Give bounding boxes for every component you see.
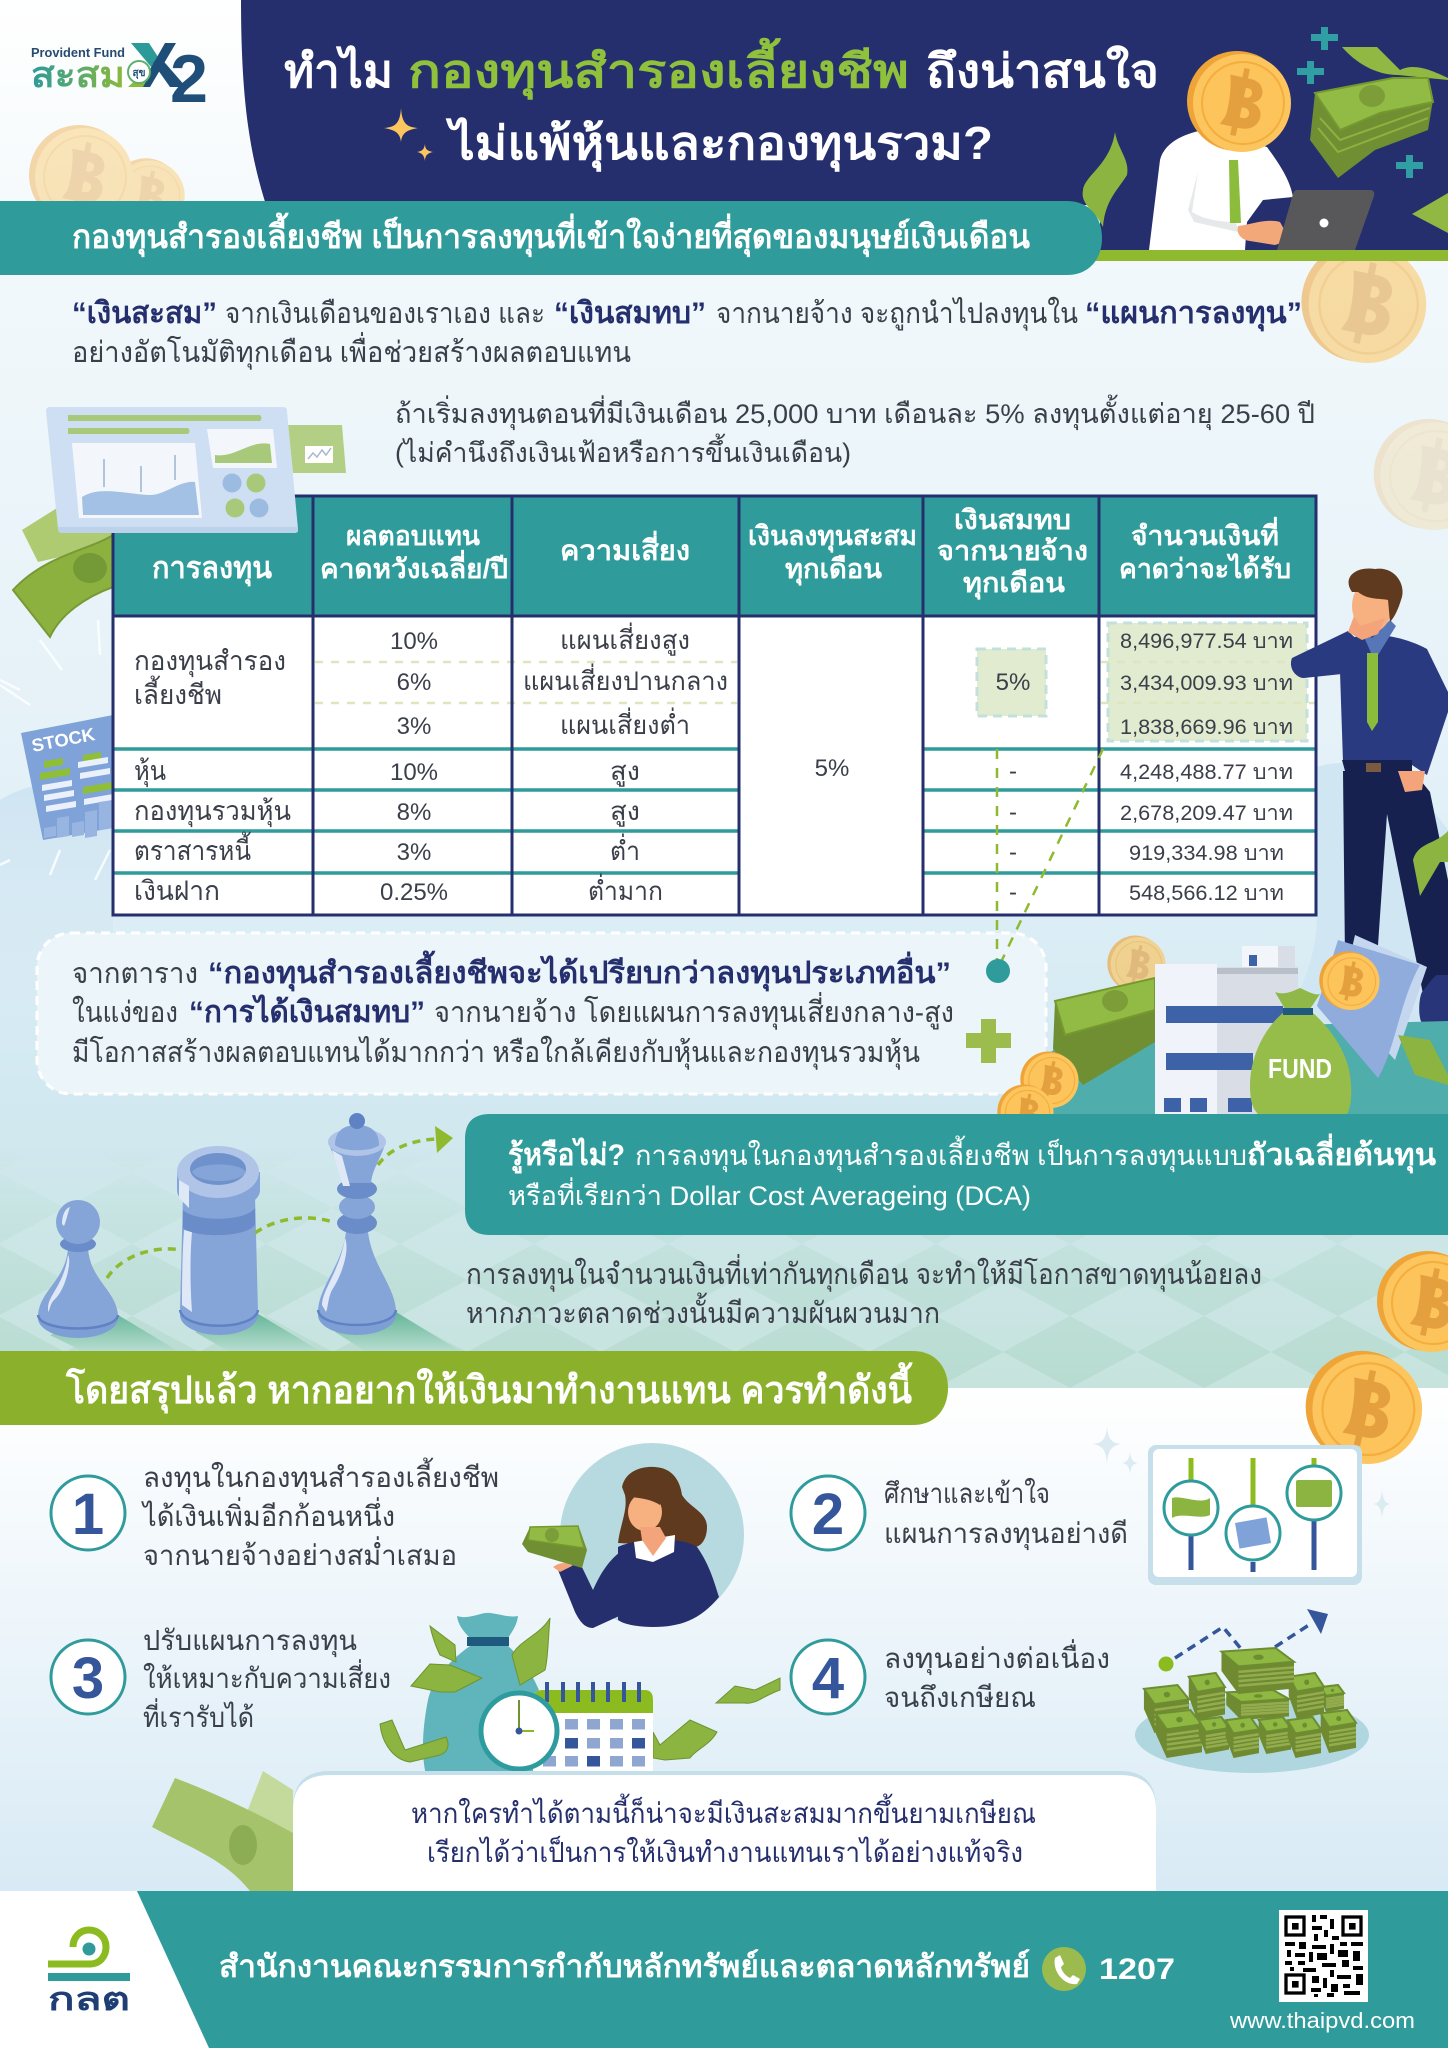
illustration: woman with cash — [522, 1443, 744, 1628]
panel: did you know — [465, 1114, 1448, 1235]
step 4: ลงทุนอย่างต่อเนื่อง — [884, 1639, 1110, 1676]
column: expected return: 3% — [397, 713, 431, 740]
header panel — [241, 0, 1448, 250]
table header labels: การลงทุน — [152, 552, 272, 587]
column: expected return: 10% — [390, 759, 438, 786]
column: risk: แผนเสี่ยงปานกลาง — [523, 663, 728, 696]
column: employer match: 5% — [996, 669, 1030, 696]
table dashed sub-row lines — [315, 662, 1315, 703]
illustration: money bag clock calendar — [380, 1613, 780, 1775]
column: expected return: 10% — [390, 628, 438, 655]
column: investment type: ตราสารหนี้ — [134, 831, 251, 866]
assumption text: (ไม่คำนึงถึงเงินเฟ้อหรือการขึ้นเงินเดือน) — [395, 433, 851, 468]
step 1: ได้เงินเพิ่มอีกก้อนหนึ่ง — [141, 1497, 395, 1532]
column: expected return: 6% — [397, 669, 431, 696]
teal bag — [423, 1613, 547, 1775]
money leaf left — [1083, 132, 1127, 227]
column: employer match — [996, 669, 1030, 906]
intro paragraph: “เงินสมทบ” — [554, 297, 706, 330]
table row lines — [113, 749, 1316, 873]
callout: table conclusion: “การได้เงินสมทบ” — [189, 994, 425, 1029]
callout: table conclusion: มีโอกาสสร้างผลตอบแทนได้มากกว่า หรือใกล้เคียงกับหุ้นและกองทุนรวมหุ้น — [72, 1035, 920, 1070]
calendar — [533, 1682, 653, 1775]
logo: Provident Fund — [31, 41, 208, 117]
column: final amount: 2,678,209.47 บาท — [1120, 802, 1293, 825]
section band: intro heading — [0, 201, 1102, 275]
table header row — [113, 496, 1316, 616]
money note behind table — [13, 500, 113, 637]
page background top — [0, 0, 1448, 1388]
arrows: chess progress — [107, 1126, 453, 1278]
column: risk: แผนเสี่ยงต่ำ — [560, 707, 690, 740]
SEC logo: กลต — [48, 1981, 130, 2017]
table header labels: คาดหวังเฉลี่ย/ปี — [320, 549, 508, 584]
table body background — [113, 496, 1316, 915]
intro paragraph — [72, 296, 1302, 370]
panel: did you know: การลงทุนในกองทุนสำรองเลี้ยงชีพ เป็นการลงทุนแบบ — [635, 1135, 1247, 1173]
DCA explanation text — [466, 1254, 1262, 1330]
title: ทำไม — [284, 45, 393, 97]
column: expected return: 0.25% — [380, 879, 448, 906]
step 3: ปรับแผนการลงทุน — [143, 1625, 357, 1658]
column: investment type: กองทุนสำรอง — [134, 646, 286, 678]
table header labels: ความเสี่ยง — [560, 530, 690, 566]
column: investment type: เงินฝาก — [134, 876, 220, 906]
bill lower right — [1398, 1035, 1448, 1085]
illustration: fund building group — [997, 935, 1448, 1139]
closing note card: หากใครทำได้ตามนี้ก็น่าจะมีเงินสะสมมากขึ้นยามเกษียณ — [411, 1793, 1036, 1829]
column: risk: แผนเสี่ยงสูง — [560, 622, 690, 656]
link dot — [986, 959, 1010, 983]
website: www.thaipvd.com — [1229, 2008, 1415, 2033]
table header labels: คาดว่าจะได้รับ — [1119, 553, 1291, 584]
title: ถึงน่าสนใจ — [926, 44, 1159, 97]
building — [1155, 946, 1298, 1114]
column: risk: สูง — [610, 796, 640, 827]
column: employer match: - — [1009, 799, 1017, 826]
column: final amount: 548,566.12 บาท — [1129, 882, 1284, 905]
table header labels: ผลตอบแทน — [346, 521, 481, 551]
column: final amount: 3,434,009.93 บาท — [1120, 672, 1293, 695]
background diamond pattern — [0, 1230, 1448, 1388]
column: investment type: กองทุนรวมหุ้น — [134, 796, 291, 828]
small money right — [1412, 193, 1448, 233]
documents — [1317, 935, 1427, 1078]
icon: phone — [1042, 1947, 1086, 1991]
step 3: ให้เหมาะกับความเสี่ยง — [143, 1659, 391, 1694]
step 3: ที่เรารับได้ — [143, 1698, 254, 1733]
table grid — [113, 496, 1316, 915]
illustration: slider card — [1148, 1445, 1362, 1585]
illustration: man thinking — [1291, 569, 1448, 1024]
callout: table conclusion: “กองทุนสำรองเลี้ยงชีพจะได้เปรียบกว่าลงทุนประเภทอื่น” — [208, 950, 951, 992]
illustration: growing money pile — [1135, 1609, 1369, 1773]
title: กองทุนสำรองเลี้ยงชีพ — [408, 37, 909, 100]
background hill left — [0, 783, 113, 1000]
hotline number: 1207 — [1099, 1953, 1175, 1986]
coin summary — [1306, 1351, 1422, 1464]
coin on documents — [1319, 951, 1380, 1010]
column: employer match: - — [1009, 758, 1017, 785]
column: risk — [523, 622, 728, 906]
pawn — [38, 1200, 118, 1338]
dashed link lines — [997, 749, 1103, 960]
panel: did you know: ถัวเฉลี่ยต้นทุน — [1247, 1133, 1437, 1174]
logo: Provident Fund: Provident Fund — [31, 45, 125, 60]
step 1: 1 — [72, 1482, 104, 1547]
logo: Provident Fund: สะสม — [31, 54, 125, 95]
rook — [177, 1146, 260, 1335]
faded coins top left — [29, 125, 185, 231]
stock sheet icon — [21, 715, 113, 840]
step 4: จนถึงเกษียณ — [884, 1682, 1036, 1713]
column: investment type: หุ้น — [134, 756, 166, 788]
step 2: 2 — [812, 1482, 844, 1547]
money stack — [1053, 978, 1155, 1085]
column: expected return: 3% — [397, 839, 431, 866]
faded coin right — [1374, 419, 1448, 530]
callout: table conclusion: ในแง่ของ — [72, 995, 178, 1029]
highlight: provident fund amounts — [1108, 623, 1307, 741]
column: final amount: 8,496,977.54 บาท — [1120, 630, 1293, 653]
DCA explanation text: การลงทุนในจำนวนเงินที่เท่ากันทุกเดือน จะทำให้มีโอกาสขาดทุนน้อยลง — [466, 1254, 1262, 1292]
table header labels: จากนายจ้าง — [937, 536, 1088, 566]
DCA explanation text: หากภาวะตลาดช่วงนั้นมีความผันผวนมาก — [466, 1292, 940, 1330]
comparison table — [113, 496, 1316, 915]
coins lower left — [1020, 1051, 1079, 1108]
callout: table conclusion: จากตาราง — [72, 958, 198, 990]
coin right middle — [1377, 1251, 1448, 1352]
step 1: ลงทุนในกองทุนสำรองเลี้ยงชีพ — [143, 1457, 499, 1495]
table header labels — [152, 505, 1291, 600]
teal hill — [1018, 1021, 1448, 1114]
column: risk: ต่ำมาก — [588, 873, 663, 906]
footer — [0, 1891, 1448, 2048]
panel: did you know: หรือที่เรียกว่า Dollar Cost Averageing (DCA) — [508, 1177, 1031, 1211]
logo: Provident Fund: 2 — [170, 41, 208, 117]
clock — [481, 1693, 557, 1769]
sparkles near slider card — [1093, 1426, 1391, 1518]
highlight: employer contribution — [977, 649, 1046, 716]
shadows — [50, 1312, 460, 1351]
step 1 — [51, 1457, 499, 1571]
column: final amount: 1,838,669.96 บาท — [1120, 716, 1293, 739]
column: final amount — [1120, 630, 1293, 905]
fund money bag — [1250, 988, 1351, 1114]
panel: did you know: รู้หรือไม่? — [508, 1137, 625, 1174]
title — [284, 37, 1159, 172]
table header labels: เงินลงทุนสะสม — [748, 521, 917, 553]
table header labels: จำนวนเงินที่ — [1131, 516, 1279, 551]
step 3 — [51, 1625, 391, 1733]
icon: plus signs — [1297, 27, 1423, 178]
title: ไม่แพ้หุ้นและกองทุนรวม? — [445, 117, 993, 172]
illustration: chess pieces — [38, 1113, 460, 1351]
callout: table conclusion — [37, 933, 1046, 1094]
section band: summary heading: โดยสรุปแล้ว หากอยากให้เงินมาทำงานแทน ควรทำดังนี้ — [65, 1362, 913, 1414]
QR code — [1279, 1910, 1368, 2002]
column: expected return — [380, 628, 448, 906]
intro paragraph: “แผนการลงทุน” — [1085, 297, 1302, 332]
icon: sparkles — [384, 108, 433, 161]
background hill right — [1200, 763, 1448, 1114]
icon: plus — [966, 1019, 1011, 1063]
column: investment type — [134, 646, 291, 906]
stock sheet icon: STOCK — [30, 724, 97, 756]
queen — [318, 1113, 396, 1335]
step 2: แผนการลงทุนอย่างดี — [884, 1518, 1128, 1551]
decorative money note bottom — [152, 1771, 293, 1891]
table header labels: ทุกเดือน — [785, 554, 883, 586]
section band: intro heading: กองทุนสำรองเลี้ยงชีพ เป็นการลงทุนที่เข้าใจง่ายที่สุดของมนุษย์เงินเดือน — [72, 212, 1030, 258]
cash stack — [522, 1526, 587, 1568]
closing note card: เรียกได้ว่าเป็นการให้เงินทำงานแทนเราได้อย่างแท้จริง — [427, 1835, 1023, 1868]
table header labels: ทุกเดือน — [963, 568, 1066, 600]
background rays — [0, 620, 110, 880]
icon: dashboard tablet — [46, 407, 346, 533]
column: risk: ต่ำ — [610, 833, 640, 866]
assumption text — [395, 394, 1315, 468]
column: expected return: 8% — [397, 799, 431, 826]
column: risk: สูง — [610, 756, 640, 787]
table header labels: เงินสมทบ — [954, 505, 1071, 535]
step 3: 3 — [72, 1646, 104, 1711]
man with coin head — [1149, 51, 1374, 250]
intro paragraph: จากเงินเดือนของเราเอง และ — [225, 298, 545, 330]
closing note card — [293, 1771, 1156, 1891]
intro paragraph: “เงินสะสม” — [72, 297, 217, 330]
column: employer match: - — [1009, 879, 1017, 906]
column: employer match: - — [1009, 839, 1017, 866]
page background bottom — [0, 1388, 1448, 1891]
flying bills — [380, 1618, 780, 1762]
SEC logo — [48, 1930, 130, 2017]
assumption text: ถ้าเริ่มลงทุนตอนที่มีเงินเดือน 25,000 บาท เดือนละ 5% ลงทุนตั้งแต่อายุ 25-60 ปี — [395, 394, 1315, 431]
intro paragraph: จากนายจ้าง จะถูกนำไปลงทุนใน — [716, 296, 1078, 331]
logo: Provident Fund: สุข — [133, 68, 146, 79]
column: final amount: 919,334.98 บาท — [1129, 842, 1284, 865]
column: final amount: 4,248,488.77 บาท — [1120, 761, 1293, 784]
step 2 — [791, 1476, 1128, 1551]
callout: table conclusion: จากนายจ้าง โดยแผนการลงทุนเสี่ยงกลาง-สูง — [434, 992, 954, 1030]
step 1: จากนายจ้างอย่างสม่ำเสมอ — [143, 1536, 457, 1571]
fund money bag: FUND — [1268, 1053, 1332, 1084]
section band: summary heading — [0, 1351, 948, 1425]
intro paragraph: อย่างอัตโนมัติทุกเดือน เพื่อช่วยสร้างผลตอบแทน — [72, 332, 631, 370]
footer organisation name: สำนักงานคณะกรรมการกำกับหลักทรัพย์และตลาดหลักทรัพย์ — [219, 1949, 1030, 1984]
step 2: ศึกษาและเข้าใจ — [884, 1477, 1050, 1509]
step 4 — [791, 1639, 1110, 1714]
step 4: 4 — [812, 1646, 844, 1711]
column: monthly savings: 5% — [815, 755, 849, 782]
flying money stack — [1310, 47, 1448, 178]
desk stripe — [1090, 250, 1448, 261]
column: investment type: เลี้ยงชีพ — [134, 675, 222, 710]
coin behind building — [1107, 935, 1166, 992]
faded coin under header — [1301, 261, 1426, 363]
